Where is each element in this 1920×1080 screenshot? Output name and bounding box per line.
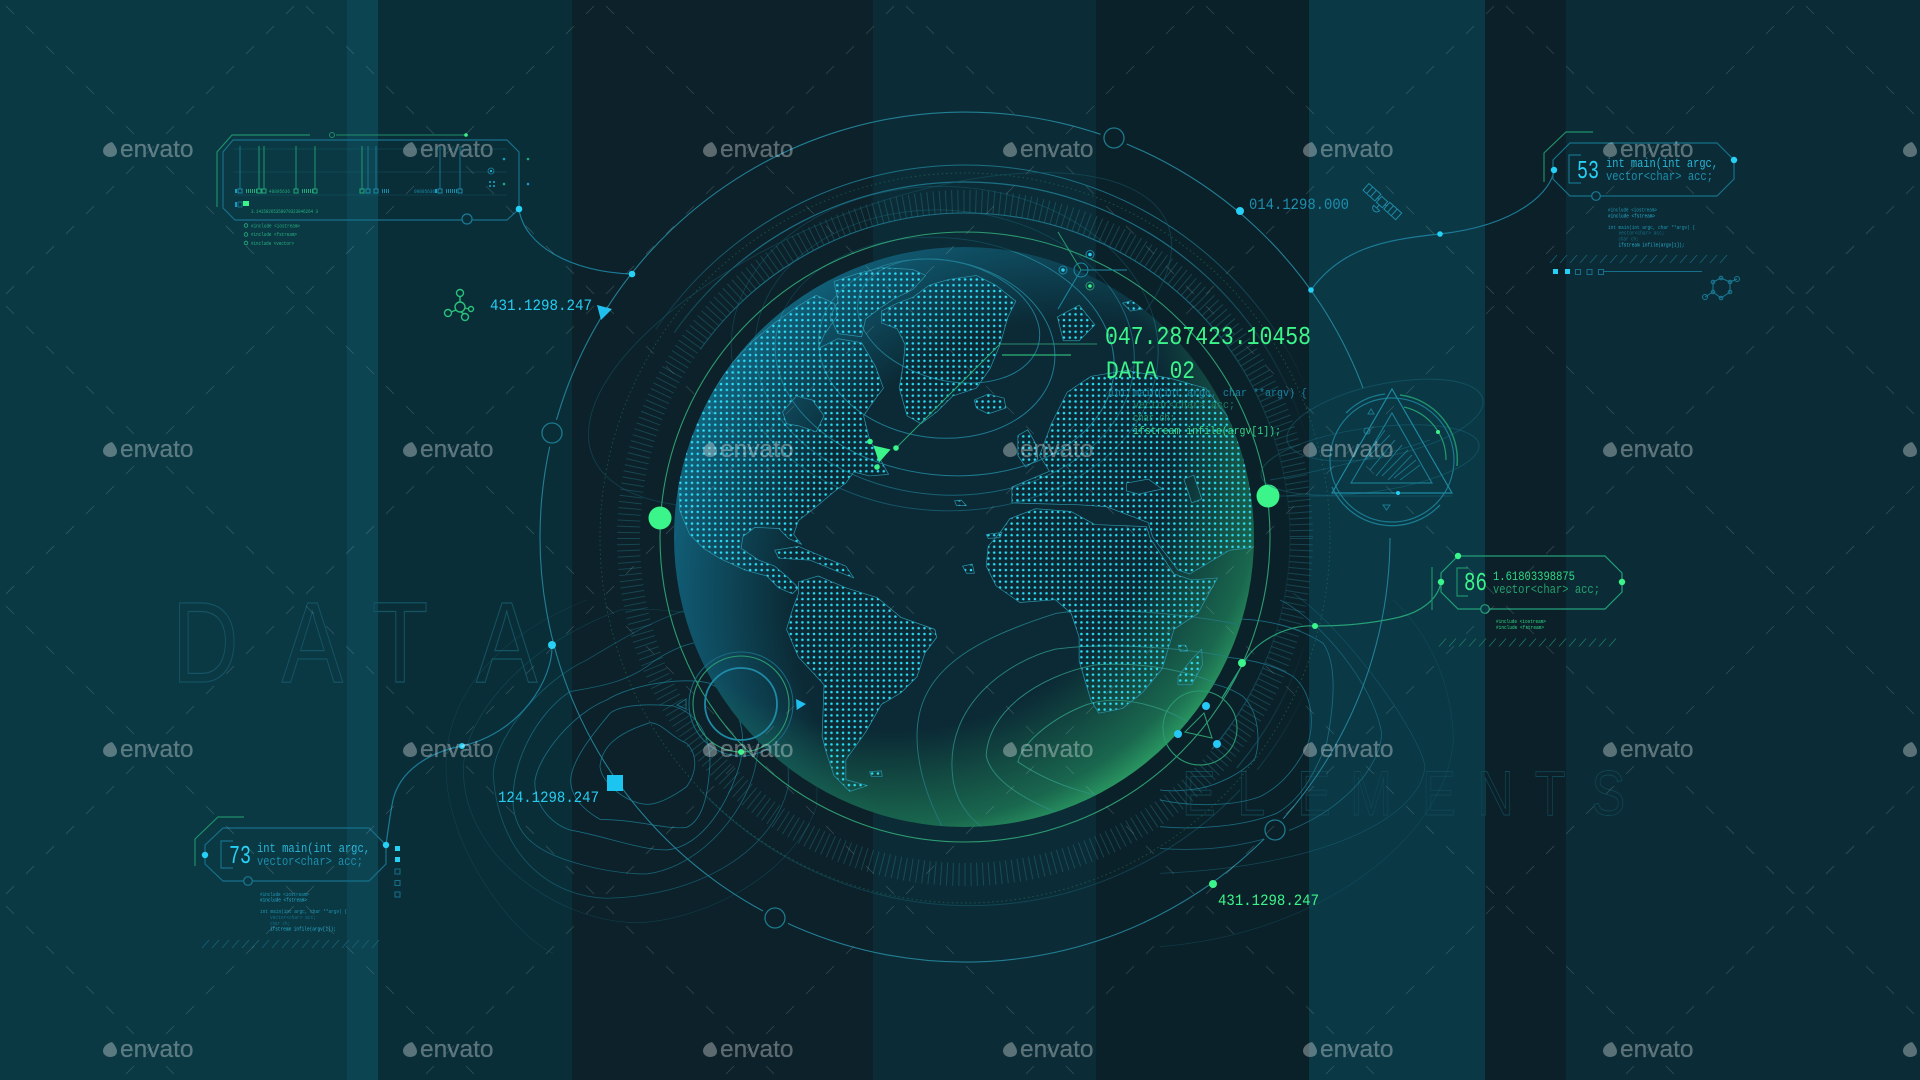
envato watermarks: envato (720, 436, 794, 463)
Madagascar (1178, 649, 1202, 685)
arrow: cyan pointer (796, 699, 806, 710)
code snippet near globe: ifstream infile(argv[1]); (1133, 426, 1281, 438)
panel: code card 73 (195, 817, 400, 944)
North and Central America (678, 295, 889, 594)
envato watermarks: envato (1620, 436, 1694, 463)
emblem triangles (1332, 389, 1452, 493)
envato watermarks: envato (1320, 1036, 1394, 1063)
node: ring left (548, 641, 556, 649)
envato watermarks: envato (1020, 736, 1094, 763)
Arctic islands (830, 268, 926, 337)
envato watermarks: envato (1620, 136, 1694, 163)
Svalbard (1057, 305, 1095, 341)
envato watermarks: envato (1620, 736, 1694, 763)
globe green glow (674, 247, 1254, 827)
barcode numbers: 09895636 (414, 188, 435, 195)
envato watermarks: envato (720, 736, 794, 763)
code block: vector<char> acc; (270, 914, 316, 921)
envato watermarks: envato (420, 136, 494, 163)
envato watermarks: envato (120, 1036, 194, 1063)
envato watermarks: envato (1320, 736, 1394, 763)
number: 86 (1464, 568, 1487, 598)
node: green ring right (1238, 659, 1246, 667)
target reticle left (677, 652, 793, 756)
icon: hexagon molecule (1702, 276, 1740, 300)
barcode ticks (235, 189, 458, 193)
ring marker top (1100, 124, 1128, 152)
progress squares (1553, 269, 1702, 274)
envato watermarks: envato (420, 736, 494, 763)
marker: cyan square (607, 775, 623, 791)
envato watermarks: envato (120, 136, 194, 163)
grid lines (234, 149, 507, 195)
pi readout and include list: #include <iostream> (251, 222, 300, 230)
small islands (870, 300, 1188, 776)
pi readout and include list: #include <vector> (251, 240, 294, 247)
pi readout and include list: #include <fstream> (251, 231, 297, 238)
envato watermarks: envato (1320, 136, 1394, 163)
code block: #include <fstream> (1496, 624, 1544, 631)
card text: vector<char> acc; (1606, 170, 1713, 184)
green pointer triangle (874, 446, 890, 462)
code snippet near globe: vector<char> acc; (1133, 400, 1235, 412)
hatch strip (205, 940, 385, 948)
globe contours and continents (678, 250, 1254, 826)
emblem green arcs (1400, 395, 1457, 466)
node: cyan top right (1236, 207, 1244, 215)
target reticle right (1163, 691, 1237, 765)
panel: top-left barcode readout (217, 132, 529, 247)
corner node (516, 206, 522, 212)
card text: int main(int argc, (257, 842, 370, 856)
card frame (205, 828, 386, 881)
code block (1496, 618, 1546, 631)
Britain (1018, 430, 1038, 467)
barcode numbers (269, 188, 435, 195)
envato watermarks: envato (420, 1036, 494, 1063)
code block: int main(int argc, char **argv) { (1608, 224, 1695, 231)
big readout: data label: DATA 02 (1106, 357, 1195, 386)
arrow: cyan triangle on ring (597, 305, 612, 320)
vertical bars (238, 146, 462, 193)
pi readout and include list: 3.14159265358979323846264 3 (251, 208, 318, 215)
envato watermarks: envato (1020, 1036, 1094, 1063)
number: 73 (229, 841, 251, 871)
orbit lines (1257, 364, 1490, 507)
bottom knob (462, 214, 472, 224)
number bracket (221, 841, 233, 868)
green corner bracket (1544, 132, 1593, 182)
status marker row (235, 201, 249, 207)
emblem rings (1330, 398, 1454, 522)
node: green bottom right (1209, 880, 1217, 888)
hatch strip (1553, 255, 1733, 263)
number: 53 (1577, 156, 1599, 186)
code snippet near globe: int main(int argc, char **argv) { (1109, 388, 1307, 400)
green orbit ring (660, 232, 1270, 842)
card nodes (1551, 157, 1737, 200)
envato watermarks: envato (1020, 436, 1094, 463)
globe base sphere (674, 247, 1254, 827)
envato watermarks: envato (1620, 1036, 1694, 1063)
panel: code card 53 (1544, 132, 1740, 300)
panel: code card 86 (1432, 553, 1625, 642)
node: ring upper right (1308, 287, 1314, 293)
card nodes (202, 842, 389, 885)
code block (260, 891, 347, 932)
locator callout over North America (867, 344, 1097, 470)
faint title: DATA: DATA (172, 579, 538, 707)
label: 014.1298.000: 014.1298.000 (1249, 196, 1349, 214)
code block: #include <iostream> (1608, 206, 1657, 214)
globe (674, 247, 1254, 827)
node: connector upper right (1437, 231, 1443, 237)
card text (1493, 570, 1600, 597)
card nodes (1438, 553, 1625, 613)
ring marker lower right (1261, 816, 1289, 844)
outer orbit ring with markers (538, 112, 1390, 962)
Iceland (974, 394, 1006, 414)
large green node left (648, 506, 672, 530)
code snippet near globe (1109, 388, 1307, 438)
emblem accents (1364, 428, 1370, 434)
node: green connector (1312, 623, 1318, 629)
large green node right (1256, 484, 1280, 508)
code block: #include <iostream> (1496, 618, 1546, 625)
card text: vector<char> acc; (1493, 583, 1600, 597)
ring marker left (538, 419, 566, 447)
tick ring and concentric rings (544, 103, 1338, 911)
contour map: lower right (1160, 593, 1453, 947)
code block: ifstream infile(argv[1]); (270, 926, 336, 932)
envato watermarks: envato (120, 436, 194, 463)
code block: ifstream infile(argv[1]); (1618, 242, 1684, 248)
progress squares (395, 846, 400, 897)
outer ring arc (540, 112, 1390, 962)
card text (1606, 157, 1718, 184)
South America (787, 576, 937, 791)
card frame (1553, 143, 1734, 196)
faint title: ELEMENTS: ELEMENTS (1182, 759, 1625, 829)
label: 431.1298.247 top left: 431.1298.247 (490, 297, 592, 315)
callout leader lines (896, 344, 1097, 448)
globe blue rim light (674, 247, 1254, 827)
label: 124.1298.247: 124.1298.247 (498, 789, 599, 807)
card text (257, 842, 370, 869)
envato watermarks: envato (1020, 136, 1094, 163)
hatch strip (1442, 638, 1622, 646)
node: green below reticle (738, 749, 744, 755)
code snippet near globe: char ch; (1133, 413, 1175, 425)
top connector (330, 132, 468, 138)
contour map: lower left (446, 600, 817, 953)
node: ring top-left (629, 271, 635, 277)
panel frame (223, 140, 519, 220)
emblem: triangle in rings (1260, 378, 1484, 526)
barcode numbers: 48895636 (269, 188, 290, 195)
card text: 1.61803398875 (1493, 570, 1575, 584)
Africa (986, 509, 1218, 713)
number bracket (1569, 155, 1581, 183)
envato watermarks: envato (720, 136, 794, 163)
code block: #include <iostream> (260, 891, 309, 898)
emblem hatching (1360, 430, 1420, 480)
connector curves (386, 170, 1554, 845)
green corner bracket (217, 135, 310, 207)
label: 431.1298.247 bottom right: 431.1298.247 (1218, 892, 1319, 910)
envato watermarks: envato (1320, 436, 1394, 463)
contour lines beyond the globe: north (726, 179, 1164, 518)
Europe and Asia (1012, 370, 1261, 574)
Greenland (881, 275, 1016, 424)
card text: int main(int argc, (1606, 157, 1718, 171)
envato watermarks: envato (120, 736, 194, 763)
code block: int main(int argc, char **argv) { (260, 908, 347, 915)
Cuba (775, 546, 854, 578)
green corner bracket (195, 817, 244, 866)
card frame (1441, 556, 1622, 609)
big readout: coordinates: 047.287423.10458 (1105, 322, 1311, 352)
envato watermarks: envato (420, 436, 494, 463)
code block: #include <fstream> (260, 896, 307, 904)
node: contour (459, 743, 465, 749)
pi readout and include list (244, 208, 318, 247)
icon: molecule (444, 290, 474, 320)
dotted continents (678, 268, 1261, 791)
ring marker bottom (761, 904, 789, 932)
card text: vector<char> acc; (257, 855, 363, 869)
envato watermarks: envato (720, 1036, 794, 1063)
code block (1608, 206, 1695, 248)
code block: char ch; (270, 920, 290, 927)
code block: char ch; (1618, 236, 1638, 242)
satellite tracker cluster (1058, 232, 1127, 309)
vertical side line (1431, 567, 1433, 610)
code block: #include <fstream> (1608, 212, 1655, 220)
number bracket (1457, 568, 1468, 596)
code block: vector<char> acc; (1618, 230, 1664, 236)
icon: satellite (1358, 184, 1402, 226)
right side status dots (488, 158, 529, 187)
ocean contour lines (732, 250, 1240, 826)
